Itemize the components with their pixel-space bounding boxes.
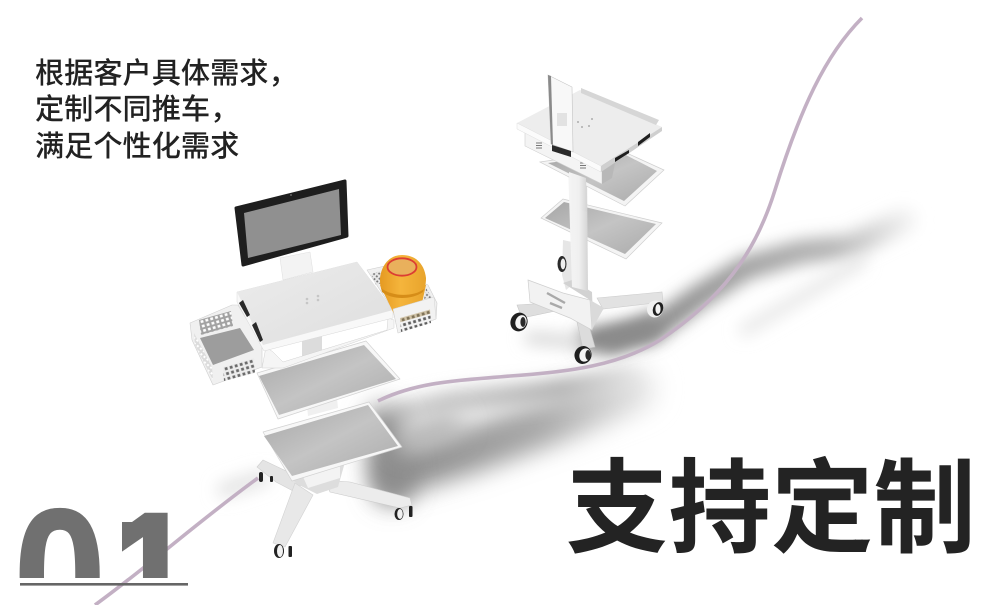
rear cart casters [508, 298, 665, 366]
rear upper shelf [540, 150, 664, 206]
right basket front [393, 297, 436, 333]
front cart base [257, 460, 412, 558]
number 01 [14, 480, 198, 578]
top tray [237, 262, 393, 351]
front cart [190, 181, 437, 558]
connector [307, 398, 338, 416]
rear cart [508, 75, 665, 366]
rear box [525, 130, 602, 184]
rear tray [517, 90, 662, 166]
heading: 支持定制 [566, 451, 976, 566]
right basket back [367, 266, 437, 333]
front upper shelf [257, 341, 400, 419]
intro text: 根据客户具体需求， [35, 57, 298, 90]
front lower shelf [263, 402, 402, 481]
intro text: 满足个性化需求 [35, 130, 239, 163]
rear display mount [548, 75, 573, 152]
support arm [262, 318, 394, 368]
left basket [190, 305, 262, 385]
number underline [20, 583, 188, 586]
intro text: 定制不同推车， [35, 93, 239, 126]
intro text [35, 57, 298, 163]
monitor stand [280, 252, 313, 280]
rear cart base [508, 240, 665, 366]
sharps container [380, 255, 426, 314]
rear column [568, 165, 588, 291]
curve line [95, 18, 862, 605]
rear lower shelf [541, 199, 662, 259]
monitor [236, 181, 347, 265]
cast shadows [225, 220, 905, 490]
front cart casters [259, 472, 412, 558]
